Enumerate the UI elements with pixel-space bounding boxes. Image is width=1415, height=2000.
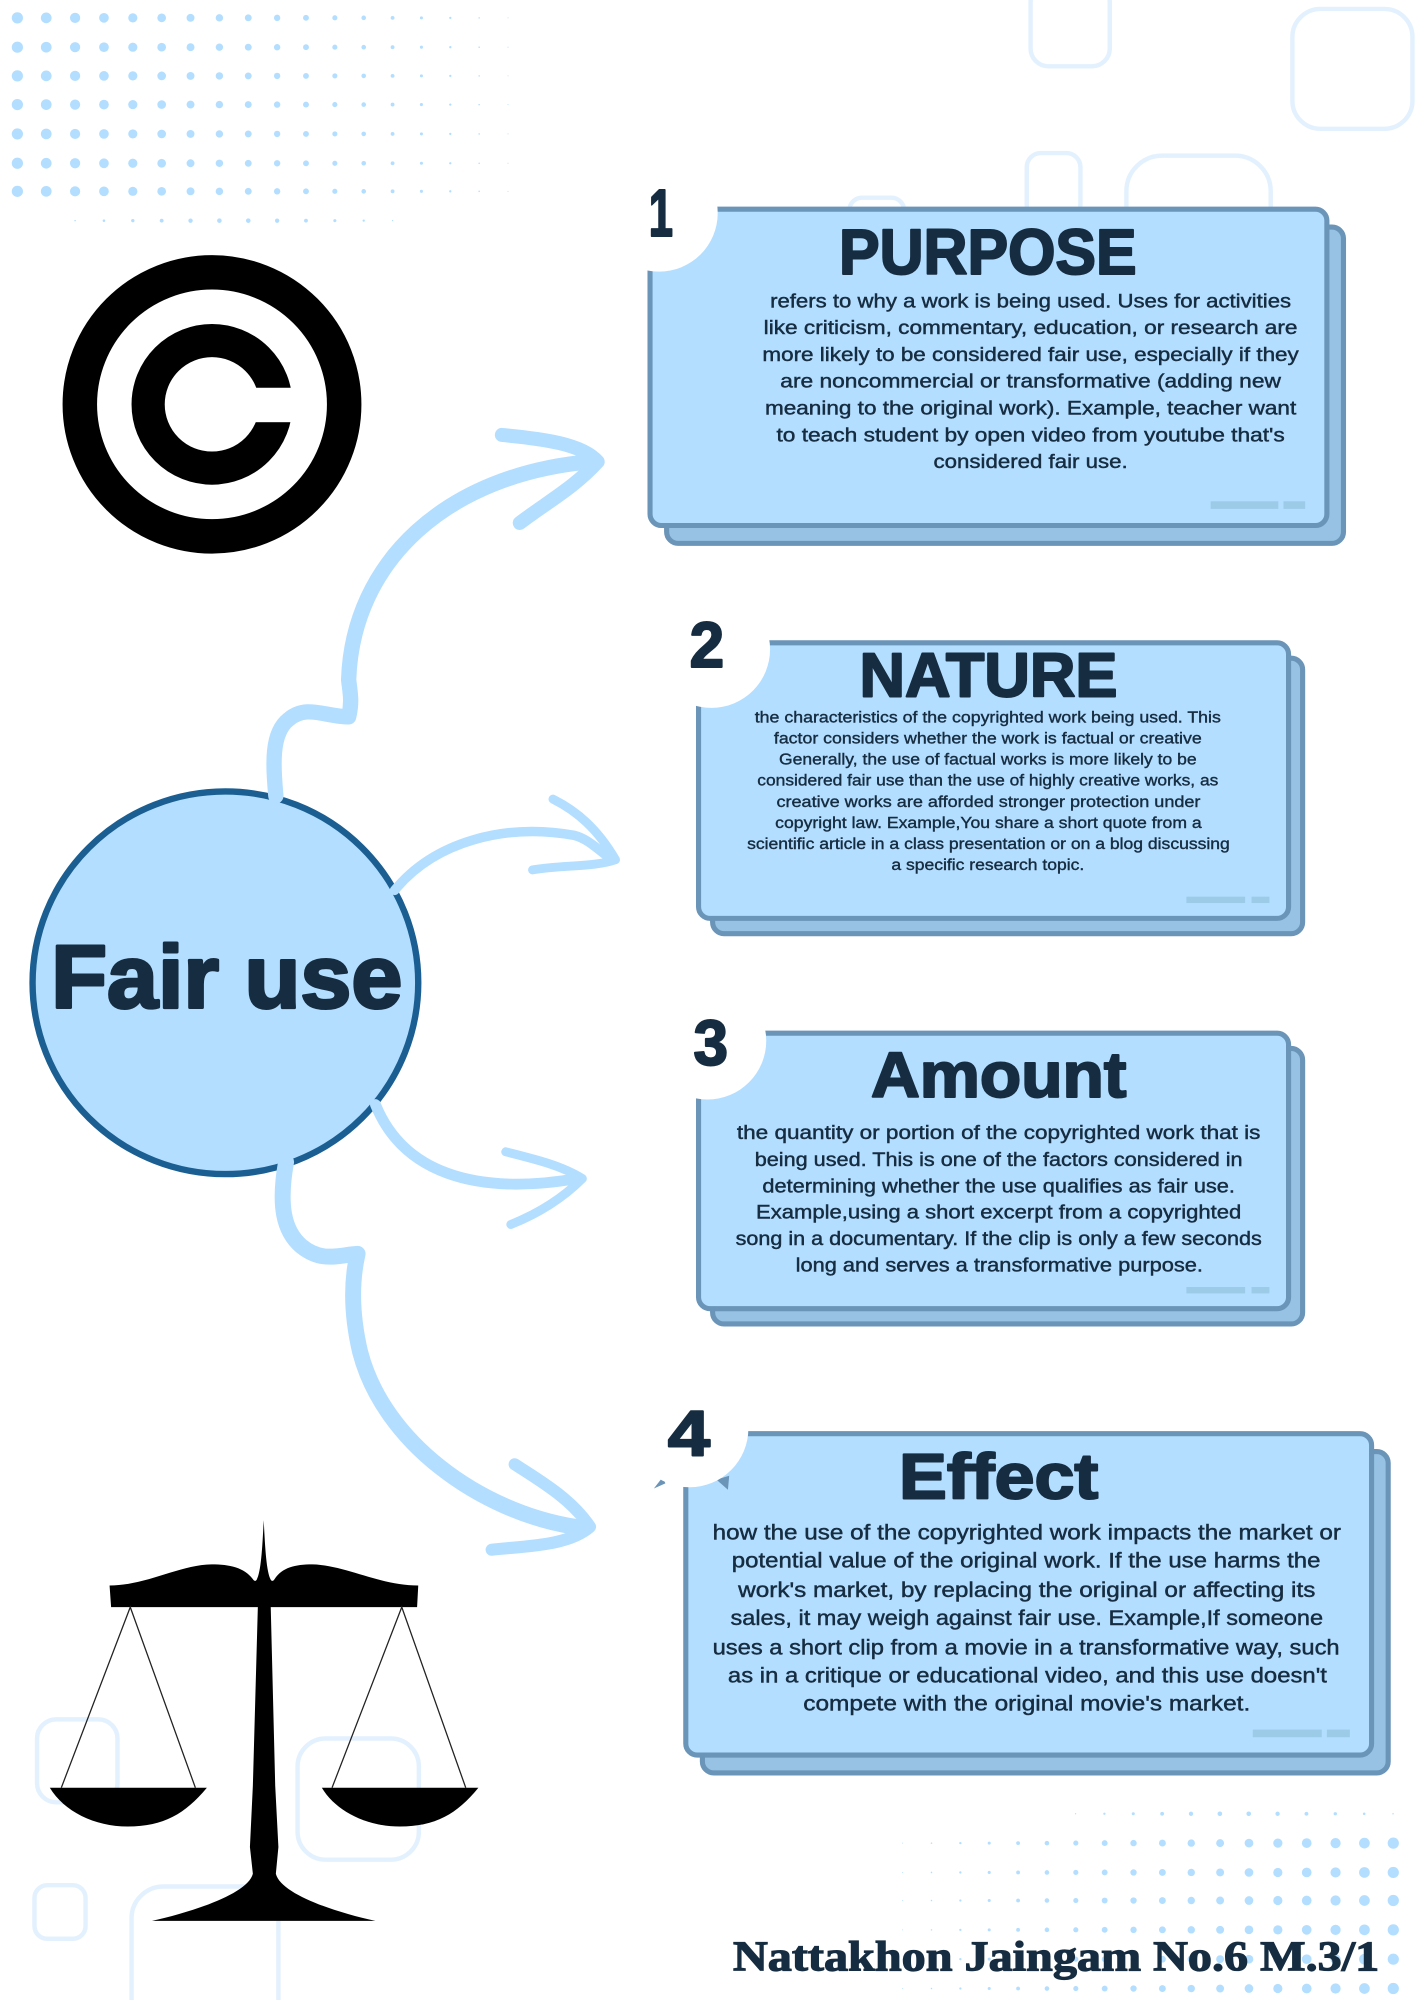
footer marks [1186,897,1269,903]
text: Amount body: the quantity or portion of the copyrighted work that is [737,1122,1261,1144]
footer marks [1211,501,1305,509]
heading: PURPOSE: PURPOSE [839,216,1137,288]
text: Effect body: potential value of the original work. If the use harms the [732,1550,1320,1573]
text: Nature body: a specific research topic. [891,857,1084,874]
text: Amount body: long and serves a transformative purpose. [796,1255,1203,1277]
arrow: to Effect [283,1162,590,1550]
arrow: to Nature [395,799,616,890]
text: Amount body [736,1122,1262,1277]
central circle: Fair use: Fair use [51,927,402,1027]
text: Purpose body: meaning to the original work). Example, teacher want [765,398,1297,420]
text: Amount body: determining whether the use qualifies as fair use. [762,1176,1235,1198]
panel: 4 Effect [631,1370,1388,1773]
text: Effect body: as in a critique or educational video, and this use doesn't [728,1664,1327,1687]
text: Nature body: Generally, the use of factual works is more likely to be [779,752,1197,769]
heading: NATURE: NATURE [859,640,1117,710]
author credit: Nattakhon Jaingam No.6 M.3/1 [733,1934,1379,1981]
text: Nature body: scientific article in a class presentation or on a blog discussing [747,836,1230,853]
text: Effect body: uses a short clip from a movie in a transformative way, such [713,1636,1340,1659]
text: Purpose body: to teach student by open video from youtube that's [776,424,1285,446]
footer marks [1253,1730,1350,1737]
footer marks [1186,1287,1269,1293]
text: Effect body: sales, it may weigh against fair use. Example,If someone [730,1607,1323,1630]
number badge 3: 3 [693,1007,728,1079]
text: Purpose body: like criticism, commentary, education, or research are [764,317,1298,339]
number badge 1 [600,154,718,272]
panel: 2 Nature [653,591,1303,934]
number badge 2: 2 [690,609,724,681]
number badge 4 [631,1370,748,1487]
badge corner ticks [654,1476,729,1490]
text: Nature body: creative works are afforded stronger protection under [776,794,1201,811]
text: Purpose body: considered fair use. [934,451,1128,473]
text: Purpose body: more likely to be considered fair use, especially if they [762,344,1299,366]
text: Nature body [747,710,1230,874]
text: Nature body: factor considers whether the work is factual or creative [774,731,1202,748]
dot pattern: bottom right [902,1811,1399,1994]
text: Purpose body: refers to why a work is being used. Uses for activities [770,290,1291,312]
text: Purpose body [762,290,1299,473]
text: Purpose body: are noncommercial or transformative (adding new [780,371,1282,393]
rounded outline decorations: bottom left [34,1719,419,2000]
text: Amount body: being used. This is one of the factors considered in [755,1149,1243,1171]
heading: Amount: Amount [871,1039,1126,1111]
panel: 1 Purpose [600,154,1343,543]
text: Nature body: considered fair use than the use of highly creative works, as [757,773,1218,790]
text: Effect body: how the use of the copyrighted work impacts the market or [713,1522,1341,1545]
central circle: Fair use [33,791,418,1174]
text: Effect body: compete with the original movie's market. [803,1692,1250,1715]
text: Effect body [713,1522,1341,1715]
icon: copyright symbol [80,272,344,536]
number badge 4: 4 [668,1397,711,1469]
text: Amount body: song in a documentary. If the clip is only a few seconds [736,1228,1262,1250]
arrow: to Purpose [274,435,598,796]
number badge 1: 1 [649,177,673,251]
heading: Effect: Effect [899,1441,1098,1513]
text: Nature body: the characteristics of the copyrighted work being used. This [755,710,1221,727]
text: Effect body: work's market, by replacing the original or affecting its [737,1579,1315,1602]
icon: balance scale [50,1520,478,1921]
text: Nature body: copyright law. Example,You share a short quote from a [775,815,1202,832]
text: Amount body: Example,using a short excerpt from a copyrighted [756,1202,1241,1224]
arrow: to Amount [375,1105,582,1224]
panel: 3 Amount [649,982,1303,1324]
number badge 2 [653,591,770,708]
number badge 3 [649,982,766,1099]
rounded outline decorations: top right [849,0,1412,270]
dot pattern: top left [12,12,509,223]
